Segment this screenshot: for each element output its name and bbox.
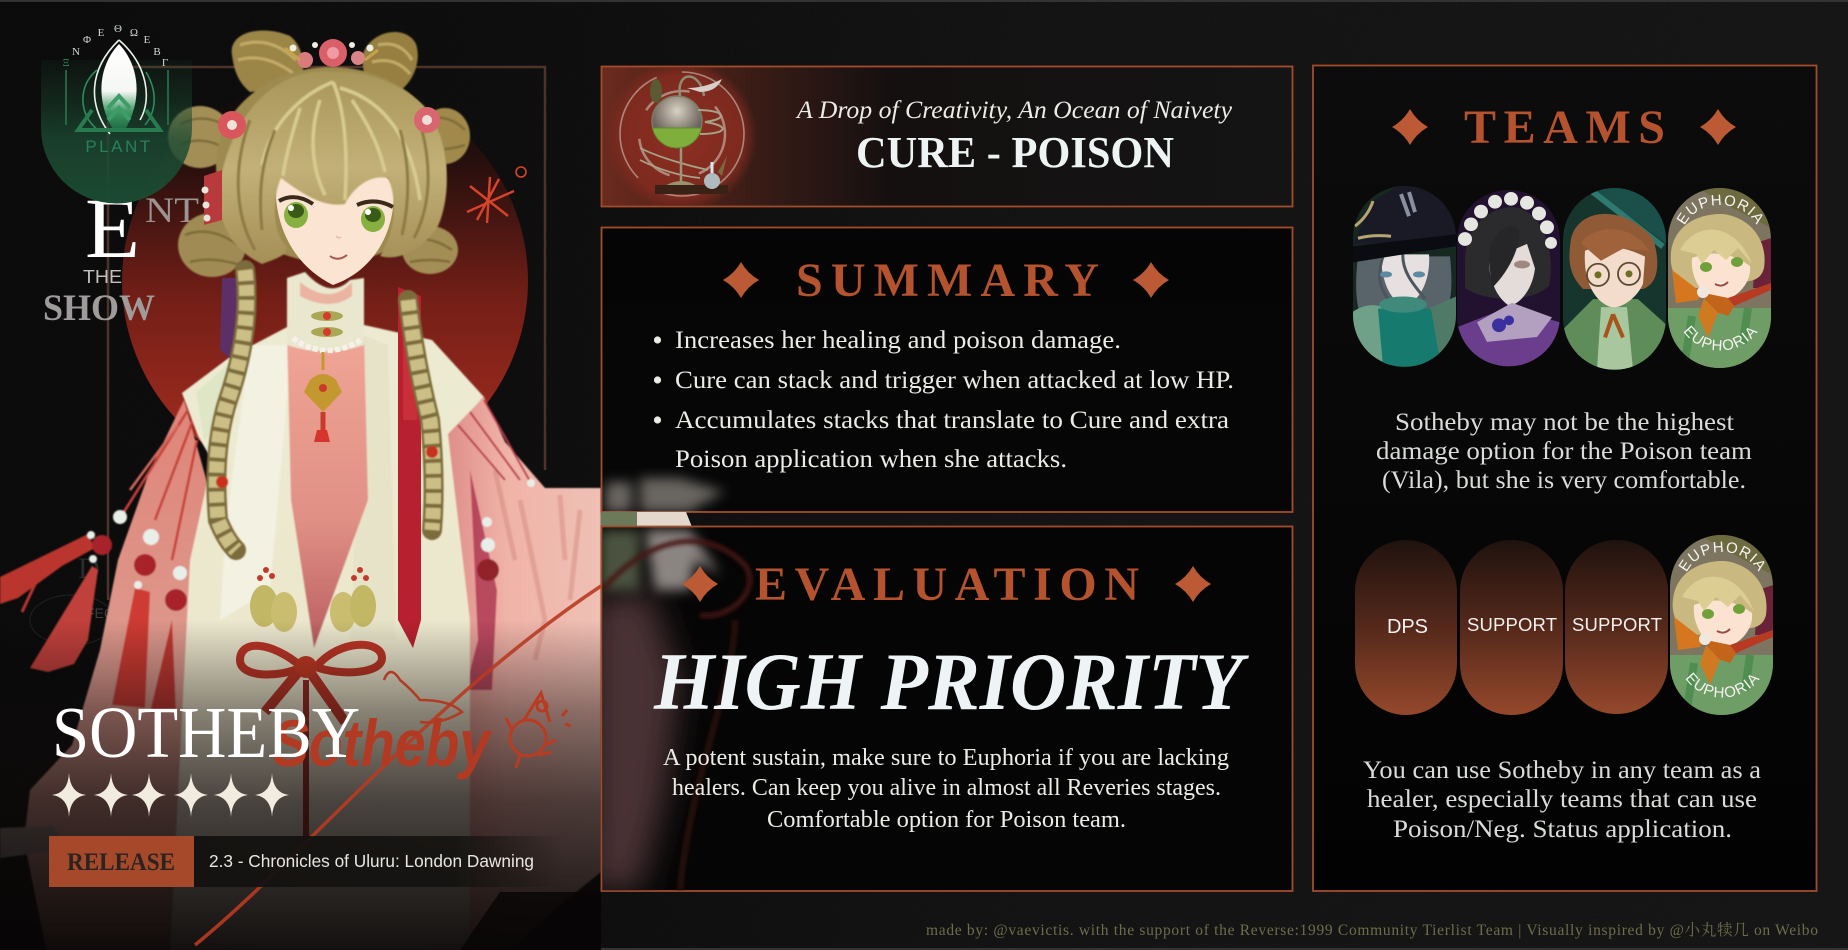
role pill: support — [1565, 540, 1668, 714]
logo glyph ring: Γ — [162, 57, 168, 69]
heading: summary: SUMMARY — [796, 254, 1099, 307]
teams text two — [1363, 755, 1761, 843]
long red string — [195, 586, 601, 945]
enter the show wordmark: THE — [83, 267, 122, 287]
skill title: A Drop of Creativity, An Ocean of Naivety — [795, 97, 1233, 124]
teams text one: damage option for the Poison team — [1376, 436, 1752, 465]
role pill: support: SUPPORT — [1572, 614, 1662, 635]
logo glyph ring: Ε — [144, 34, 151, 46]
rating: HIGH PRIORITY — [653, 636, 1250, 727]
teams text two: You can use Sotheby in any team as a — [1363, 755, 1761, 784]
teams text one — [1376, 407, 1752, 494]
portrait: sotheby euphoria: EUPHORIA — [1684, 325, 1758, 351]
logo glyph ring: Φ — [83, 34, 91, 46]
logo glyph ring: Ν — [72, 46, 80, 58]
evaluation text: Comfortable option for Poison team. — [767, 807, 1126, 833]
release banner — [49, 836, 564, 887]
character name: SOTHEBY — [52, 692, 360, 773]
role pill: DPS: DPS — [1387, 616, 1428, 638]
party doodle — [506, 693, 571, 768]
heading: evaluation: EVALUATION — [755, 558, 1139, 611]
right sleeve — [420, 397, 601, 950]
teams text one: Sotheby may not be the highest — [1395, 407, 1734, 436]
summary bullet list: Cure can stack and trigger when attacked at low HP. — [675, 367, 1234, 394]
enter the show wordmark: E — [85, 180, 140, 276]
hand strip between panels — [601, 512, 692, 527]
decorative red asterisk — [467, 167, 526, 223]
summary bullet list: Poison application when she attacks. — [675, 446, 1067, 473]
plant shield logo — [41, 40, 192, 204]
portrait: witch in dark hat — [1353, 186, 1456, 367]
blurred hand overlapping summary panel — [604, 478, 725, 512]
heading: teams — [1392, 101, 1736, 154]
dark corner below the evaluation panel — [460, 892, 601, 950]
role pill: support — [1460, 540, 1563, 715]
red bow — [240, 645, 382, 840]
red signature with doodles: Sotheby — [272, 706, 493, 780]
clothing: white robe with pink centre panel — [170, 272, 484, 950]
teams text two: healer, especially teams that can use — [1367, 784, 1757, 813]
logo glyph ring: Ξ — [62, 57, 70, 69]
red signature with doodles — [272, 672, 571, 780]
portrait: sotheby euphoria second — [1670, 535, 1773, 715]
faint background lettering: FECL — [86, 605, 122, 621]
enter the show wordmark: NT — [145, 190, 199, 230]
panel: skill header — [602, 60, 1292, 212]
evaluation text: healers. Can keep you alive in almost all Reveries stages. — [672, 775, 1221, 801]
role pill: support: SUPPORT — [1467, 614, 1557, 635]
bottom darkening over figure — [0, 620, 601, 950]
logo label: PLANT — [85, 137, 153, 156]
heading: teams: TEAMS — [1464, 101, 1665, 154]
red ribbons and purple ribbon — [220, 278, 421, 648]
eyes — [279, 197, 393, 232]
enter the show wordmark: SHOW — [43, 288, 155, 329]
red circle backdrop — [122, 78, 528, 484]
blurred sleeve behind evaluation text — [590, 530, 750, 890]
thin frame behind the character — [108, 67, 545, 600]
logo glyph ring: Ε — [98, 27, 105, 39]
enter the show wordmark — [43, 180, 199, 329]
teams text two: Poison/Neg. Status application. — [1393, 814, 1732, 843]
portrait: sotheby euphoria second: EUPHORIA — [1686, 672, 1760, 698]
left sleeve with red cords and tassels — [0, 400, 240, 950]
logo glyph ring: Θ — [114, 23, 122, 35]
hair back, buns and side loops — [168, 30, 470, 277]
portrait: girl with glasses and green coat — [1563, 188, 1666, 370]
portrait: sotheby euphoria second: EUPHORIA — [1678, 542, 1764, 572]
heading: summary — [723, 254, 1169, 307]
role pill: DPS — [1355, 540, 1457, 715]
braids — [216, 270, 438, 550]
panel: evaluation — [590, 526, 1292, 891]
release banner: RELEASE — [67, 849, 175, 876]
six rarity stars — [52, 773, 289, 817]
portrait: pale girl with lace bonnet — [1457, 190, 1560, 366]
summary bullet list: Accumulates stacks that translate to Cure and extra — [675, 407, 1229, 434]
pomegranate embroidery — [250, 567, 376, 632]
logo glyph ring — [62, 23, 168, 69]
evaluation text — [663, 745, 1229, 833]
portrait: sotheby euphoria: EUPHORIA — [1676, 194, 1762, 225]
hair flowers — [202, 39, 440, 225]
panel: teams — [1312, 64, 1818, 892]
portrait: sotheby euphoria — [1668, 188, 1771, 368]
icon: flask — [611, 67, 755, 206]
panel: summary — [602, 228, 1292, 512]
summary bullet list — [654, 327, 1234, 473]
footer credit: made by: @vaevictis. with the support of the Reverse:1999 Community Tierlist Team | Visually inspired by @小丸犊几 on Weibo — [926, 921, 1818, 939]
release banner: 2.3 - Chronicles of Uluru: London Dawning — [209, 851, 534, 871]
summary bullet list: Increases her healing and poison damage. — [675, 327, 1121, 354]
hair fringe — [219, 71, 447, 264]
faint background lettering — [30, 552, 122, 645]
logo glyph ring: Β — [153, 46, 161, 58]
necklace, lock pendant and collar buttons — [293, 311, 361, 442]
teams text one: (Vila), but she is very comfortable. — [1382, 465, 1746, 494]
skill name: CURE - POISON — [856, 128, 1174, 177]
face — [276, 158, 394, 285]
logo glyph ring: Ω — [130, 27, 138, 39]
faint background lettering: D — [78, 552, 100, 585]
evaluation text: A potent sustain, make sure to Euphoria if you are lacking — [663, 745, 1229, 771]
